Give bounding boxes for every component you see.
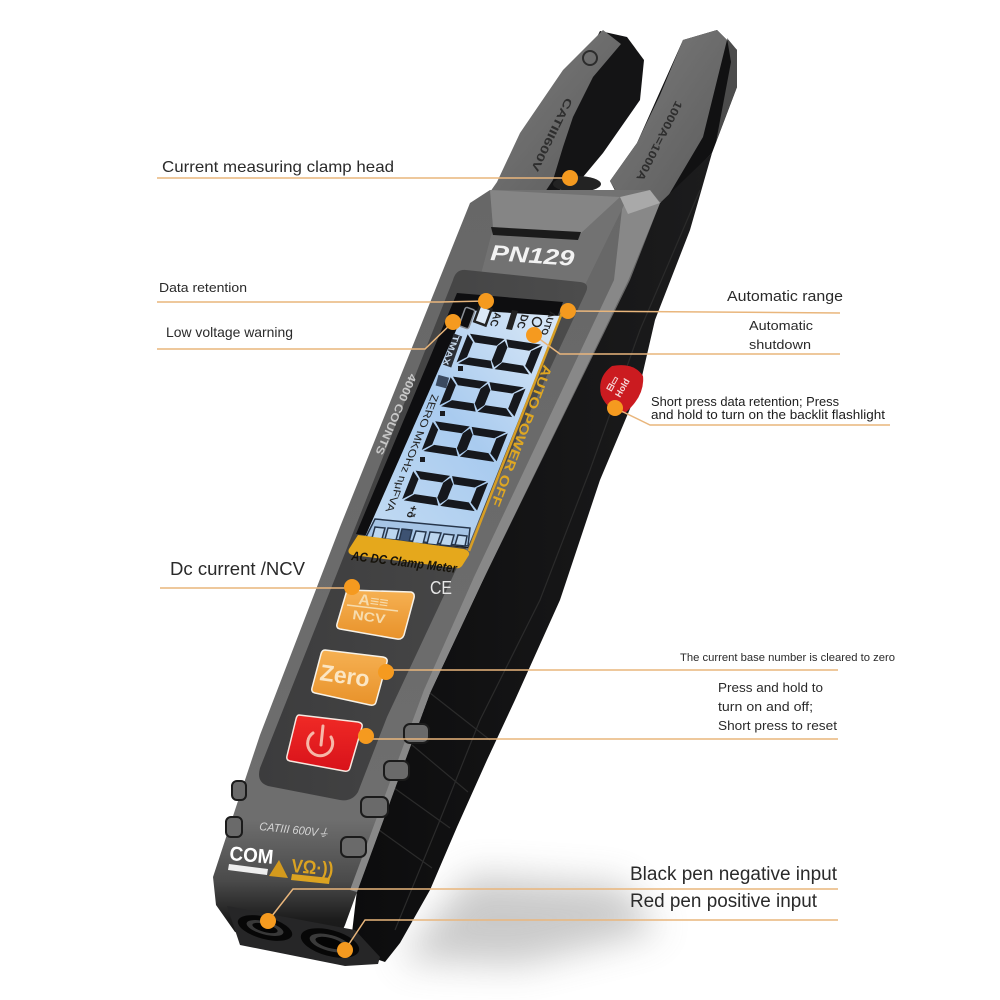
hold icon	[474, 305, 491, 326]
side grip notches	[226, 724, 429, 857]
TMAX text: TMAX	[440, 335, 462, 366]
button divider	[347, 605, 398, 611]
auto power off label: AUTO POWER OFF	[488, 363, 555, 509]
CE mark: CE	[430, 578, 452, 598]
jaw engraving: 1000A=1000A	[633, 99, 684, 183]
hold label: Hold	[613, 377, 632, 399]
COM bar	[228, 864, 268, 875]
base sockets	[227, 906, 380, 966]
label: power: turn on and off;	[718, 699, 813, 714]
label: low voltage: Low voltage warning	[166, 324, 293, 340]
cat rating: CATIII 600V⏚	[259, 820, 330, 840]
clamp meter device	[213, 30, 737, 966]
label: auto shutdown: Automatic	[749, 318, 814, 333]
button label NCV: NCV	[352, 607, 387, 627]
label: clamp head: Current measuring clamp head	[162, 159, 394, 176]
right bevel strip	[350, 200, 660, 892]
label: dc current: Dc current /NCV	[170, 559, 305, 579]
seven segment digit 3	[421, 421, 508, 462]
label: zero: The current base number is cleared to zero	[680, 652, 895, 664]
units label: ZERO MKOHz nμFVA	[382, 394, 440, 512]
AUTO label: AUTO	[539, 311, 558, 336]
symbols: +ð	[403, 505, 420, 519]
label: black pen: Black pen negative input	[630, 864, 838, 885]
decimal points	[420, 366, 463, 462]
plate bevel highlight	[620, 190, 660, 214]
TMAX label	[447, 335, 458, 366]
warning triangle	[269, 860, 288, 878]
band title: AC DC Clamp Meter	[350, 548, 458, 576]
leader lines	[157, 178, 890, 950]
label: short press: and hold to turn on the backlit flashlight	[651, 408, 886, 422]
clamp throat	[553, 176, 601, 192]
button: power	[287, 715, 362, 771]
model name: PN129	[490, 240, 576, 271]
left jaw	[490, 30, 644, 192]
V bar	[291, 874, 330, 884]
front face	[213, 190, 660, 958]
bezel count text: 4000 COUNTS	[373, 372, 418, 456]
label: power: Short press to reset	[718, 718, 837, 733]
black side of body	[350, 153, 712, 962]
yellow side line	[469, 305, 565, 551]
label: power	[718, 680, 837, 733]
AC label: AC	[486, 312, 503, 328]
seven segment digit 4	[402, 470, 488, 511]
yellow AC DC band	[348, 535, 469, 568]
right jaw edge	[716, 38, 737, 142]
hold icon: ⊟▭	[604, 374, 621, 393]
V ohm label: VΩ·))	[291, 856, 334, 881]
rel icon	[436, 375, 449, 388]
button: Zero	[312, 650, 387, 705]
label: power: Press and hold to	[718, 680, 823, 695]
DC label: DC	[513, 314, 530, 330]
hold button	[600, 365, 643, 413]
right jaw	[610, 30, 737, 205]
V socket	[298, 923, 362, 963]
drop shadow	[400, 875, 660, 965]
separator bar	[506, 310, 518, 330]
label: short press	[651, 395, 886, 422]
zero label: Zero	[318, 659, 371, 692]
head top plate	[480, 190, 661, 285]
callout dots	[260, 170, 623, 958]
icon row	[366, 519, 470, 546]
label: red pen: Red pen positive input	[630, 891, 818, 912]
label: data retention: Data retention	[159, 280, 247, 295]
seven segment digit 1	[456, 334, 543, 375]
display panel	[259, 270, 587, 800]
side contour lines	[372, 190, 700, 930]
seven segment digit 2	[439, 376, 526, 417]
label: short press: Short press data retention; Press	[651, 395, 839, 409]
button: A / NCV	[337, 590, 414, 639]
jaw engraving: CATIII600V	[528, 96, 574, 174]
label: auto shutdown	[749, 318, 814, 352]
COM label: COM	[229, 843, 274, 869]
label: auto shutdown: shutdown	[749, 337, 811, 352]
plate slot	[491, 227, 581, 240]
sleep icon	[532, 318, 542, 326]
button label A: A≡≡	[357, 591, 390, 612]
LCD screen	[365, 305, 560, 547]
COM socket	[235, 910, 295, 946]
label: automatic range: Automatic range	[727, 288, 843, 305]
power icon	[308, 726, 333, 756]
battery icon	[459, 307, 475, 329]
LCD black frame	[356, 293, 563, 548]
screw mark	[583, 51, 597, 65]
